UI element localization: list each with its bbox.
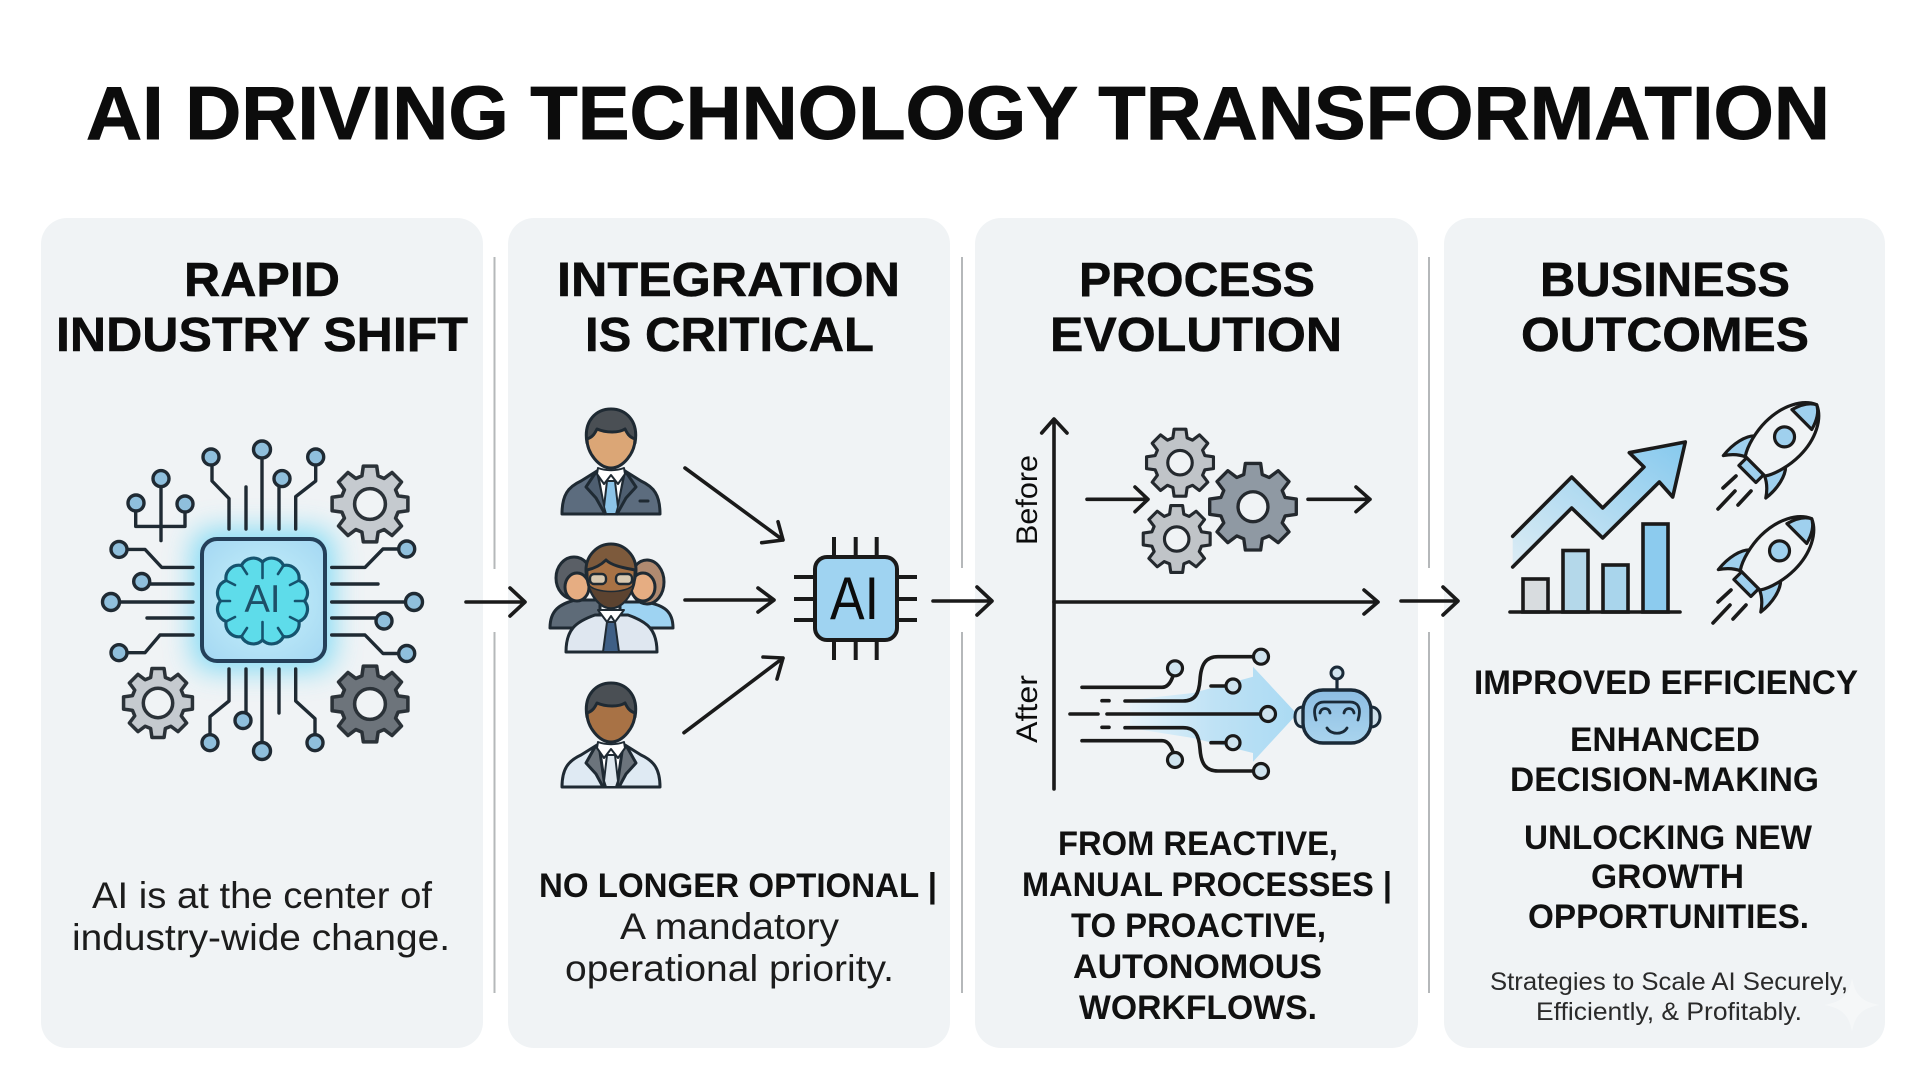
text: panel 3 description: TO PROACTIVE, (1071, 907, 1326, 945)
heading: integration is critical: IS CRITICAL (585, 309, 874, 362)
text: panel 2 description: NO LONGER OPTIONAL | (539, 867, 937, 905)
arrow: panel 3 to panel 4 (1401, 587, 1458, 615)
icon: businessman, bottom (562, 683, 660, 787)
icon: autonomous flow into robot (1070, 649, 1380, 778)
icon: businessman, top (562, 409, 660, 514)
text: strategies footnote (1490, 968, 1848, 1026)
text: panel 2 description (539, 867, 937, 989)
icon: AI chip: AI (830, 565, 879, 632)
text: strategies footnote: Efficiently, & Profitably. (1536, 998, 1802, 1026)
text: panel 3 description: MANUAL PROCESSES | (1022, 866, 1392, 904)
panel: rapid industry shift (41, 218, 483, 1048)
arrow: panel 2 to panel 3 (933, 587, 992, 615)
text: outcome list (1474, 664, 1858, 936)
text: panel 1 description: industry-wide change. (72, 917, 450, 958)
heading: integration is critical: INTEGRATION (557, 254, 900, 307)
icon: AI chip (794, 537, 917, 660)
arrow: panel 1 to panel 2 (466, 588, 525, 616)
heading: business outcomes (1521, 254, 1809, 362)
title: AI DRIVING TECHNOLOGY TRANSFORMATION (86, 71, 1830, 155)
icon: rocket, bottom (1713, 497, 1833, 623)
heading: process evolution: PROCESS (1079, 254, 1315, 307)
panel: integration is critical (508, 218, 950, 1048)
heading: process evolution: EVOLUTION (1050, 309, 1342, 362)
text: panel 3 description (1022, 825, 1392, 1027)
heading: integration is critical (557, 254, 900, 362)
icon: manual gears with arrows (1087, 429, 1370, 572)
text: outcome list: ENHANCED (1570, 721, 1760, 759)
divider 2 (961, 257, 963, 993)
panel: process evolution (975, 218, 1418, 1048)
text: outcome list: UNLOCKING NEW (1524, 819, 1813, 857)
before and after axes (1042, 419, 1378, 789)
label: before: Before (1011, 455, 1044, 545)
text: panel 2 description: operational priority. (565, 948, 894, 989)
label: after: After (1011, 675, 1044, 743)
icon: faint sparkle watermark (1824, 978, 1880, 1032)
heading: rapid industry shift: RAPID (184, 254, 340, 307)
heading: business outcomes: OUTCOMES (1521, 309, 1809, 362)
text: panel 3 description: FROM REACTIVE, (1058, 825, 1338, 863)
text: panel 2 description: A mandatory (620, 906, 840, 947)
icon: rocket, top (1718, 383, 1838, 509)
panel: business outcomes (1444, 218, 1885, 1048)
icon: AI chip brain with circuits and gears (102, 441, 422, 760)
icon: AI chip brain with circuits and gears: AI (244, 578, 280, 621)
icon: team of three people (550, 544, 673, 652)
text: panel 3 description: AUTONOMOUS (1073, 948, 1322, 986)
text: outcome list: IMPROVED EFFICIENCY (1474, 664, 1858, 702)
heading: rapid industry shift (56, 254, 468, 362)
chart: rising bars with growth arrow (1510, 442, 1685, 612)
arrows: people into AI (684, 468, 783, 733)
text: outcome list: OPPORTUNITIES. (1528, 898, 1809, 936)
text: panel 1 description (72, 875, 450, 958)
divider 3 (1428, 257, 1430, 993)
heading: process evolution (1050, 254, 1342, 362)
text: panel 3 description: WORKFLOWS. (1079, 989, 1317, 1027)
text: outcome list: DECISION-MAKING (1510, 761, 1819, 799)
text: panel 1 description: AI is at the center of (92, 875, 433, 916)
divider 1 (494, 257, 496, 993)
text: outcome list: GROWTH (1591, 858, 1744, 896)
heading: rapid industry shift: INDUSTRY SHIFT (56, 309, 468, 362)
text: strategies footnote: Strategies to Scale AI Securely, (1490, 968, 1848, 996)
heading: business outcomes: BUSINESS (1540, 254, 1790, 307)
